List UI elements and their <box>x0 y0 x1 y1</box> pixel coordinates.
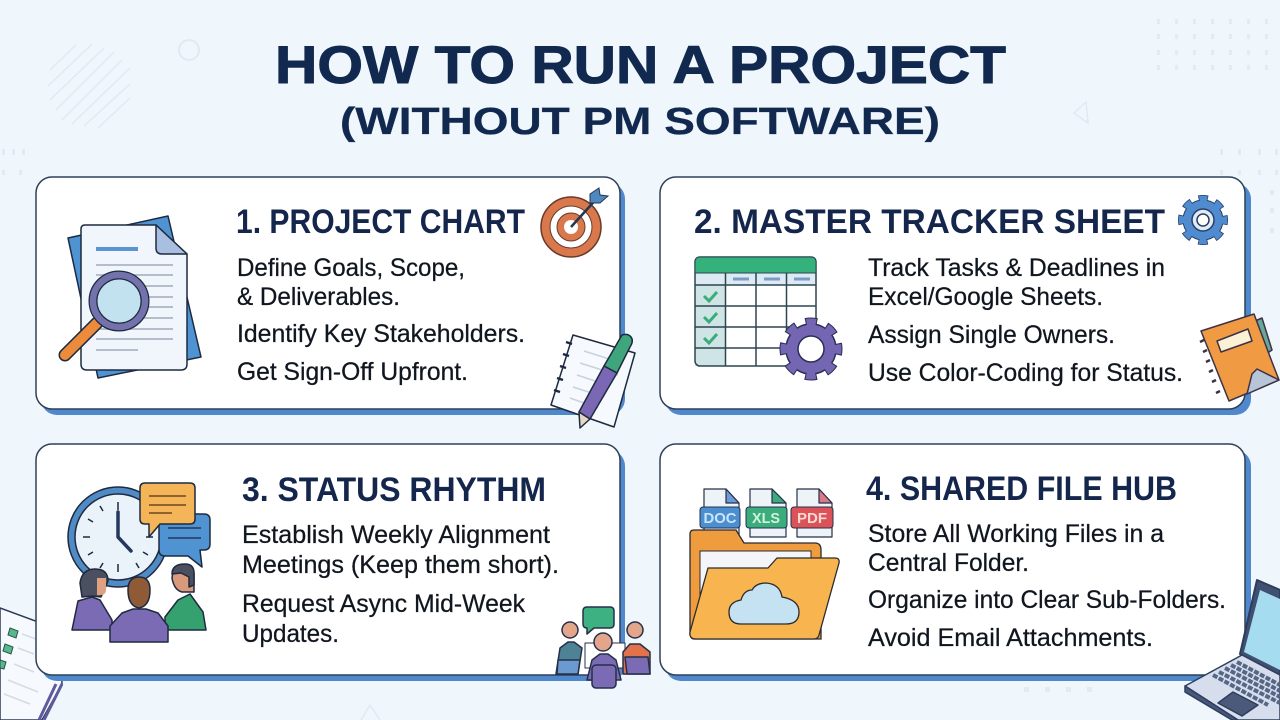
icon: blue gear <box>1182 199 1224 241</box>
body text <box>868 520 1226 652</box>
panel 3: status rhythm <box>36 444 650 688</box>
title line 1: HOW TO RUN A PROJECT <box>275 36 1006 95</box>
body text: Establish Weekly Alignment <box>242 521 550 549</box>
file badges: DOC <box>704 510 737 527</box>
panel 4: shared file hub <box>660 444 1280 720</box>
icon: notebook and pen <box>551 334 635 428</box>
body text <box>237 254 525 386</box>
panel 2: master tracker sheet <box>660 177 1279 415</box>
icon: folder with file badges <box>690 489 839 639</box>
file badges: XLS <box>752 510 780 527</box>
body text: Store All Working Files in a <box>868 520 1164 548</box>
body text: Central Folder. <box>868 549 1029 577</box>
folder front <box>690 558 839 639</box>
heading: 1. PROJECT CHART <box>236 203 525 241</box>
file icons <box>704 489 832 537</box>
body text: Track Tasks & Deadlines in <box>868 254 1165 282</box>
file badges: PDF <box>797 510 827 527</box>
icon: laptop <box>1185 580 1280 720</box>
panel 1: project chart <box>36 177 635 428</box>
icon: target with arrow <box>541 188 608 257</box>
icon: spreadsheet with gear <box>695 257 838 376</box>
icon: small meeting group <box>556 607 650 688</box>
heading: 3. STATUS RHYTHM <box>242 471 546 509</box>
body text: Assign Single Owners. <box>868 321 1115 349</box>
body text: Avoid Email Attachments. <box>868 624 1153 652</box>
cloud <box>729 583 799 624</box>
body text <box>868 254 1183 387</box>
body text: & Deliverables. <box>237 283 400 311</box>
body text: Excel/Google Sheets. <box>868 283 1103 311</box>
body text: Updates. <box>242 620 339 648</box>
icon: orange notebook <box>1200 314 1279 401</box>
file badges <box>700 507 833 528</box>
icon: document with magnifier <box>65 216 201 378</box>
body text: Use Color-Coding for Status. <box>868 359 1183 387</box>
body text: Request Async Mid-Week <box>242 590 525 618</box>
folder back <box>690 530 821 639</box>
body text: Meetings (Keep them short). <box>242 551 559 579</box>
heading: 4. SHARED FILE HUB <box>866 470 1177 508</box>
title line 2: (WITHOUT PM SOFTWARE) <box>340 101 940 143</box>
folder paper <box>700 551 811 601</box>
decorative checklist, bottom left <box>0 608 62 720</box>
body text: Identify Key Stakeholders. <box>237 320 525 348</box>
body text: Organize into Clear Sub-Folders. <box>868 586 1226 614</box>
title <box>275 36 1006 143</box>
icon: clock, chat bubbles and meeting <box>68 483 210 642</box>
body text: Get Sign-Off Upfront. <box>237 358 468 386</box>
body text <box>242 521 559 648</box>
body text: Define Goals, Scope, <box>237 254 465 282</box>
heading: 2. MASTER TRACKER SHEET <box>694 203 1165 241</box>
